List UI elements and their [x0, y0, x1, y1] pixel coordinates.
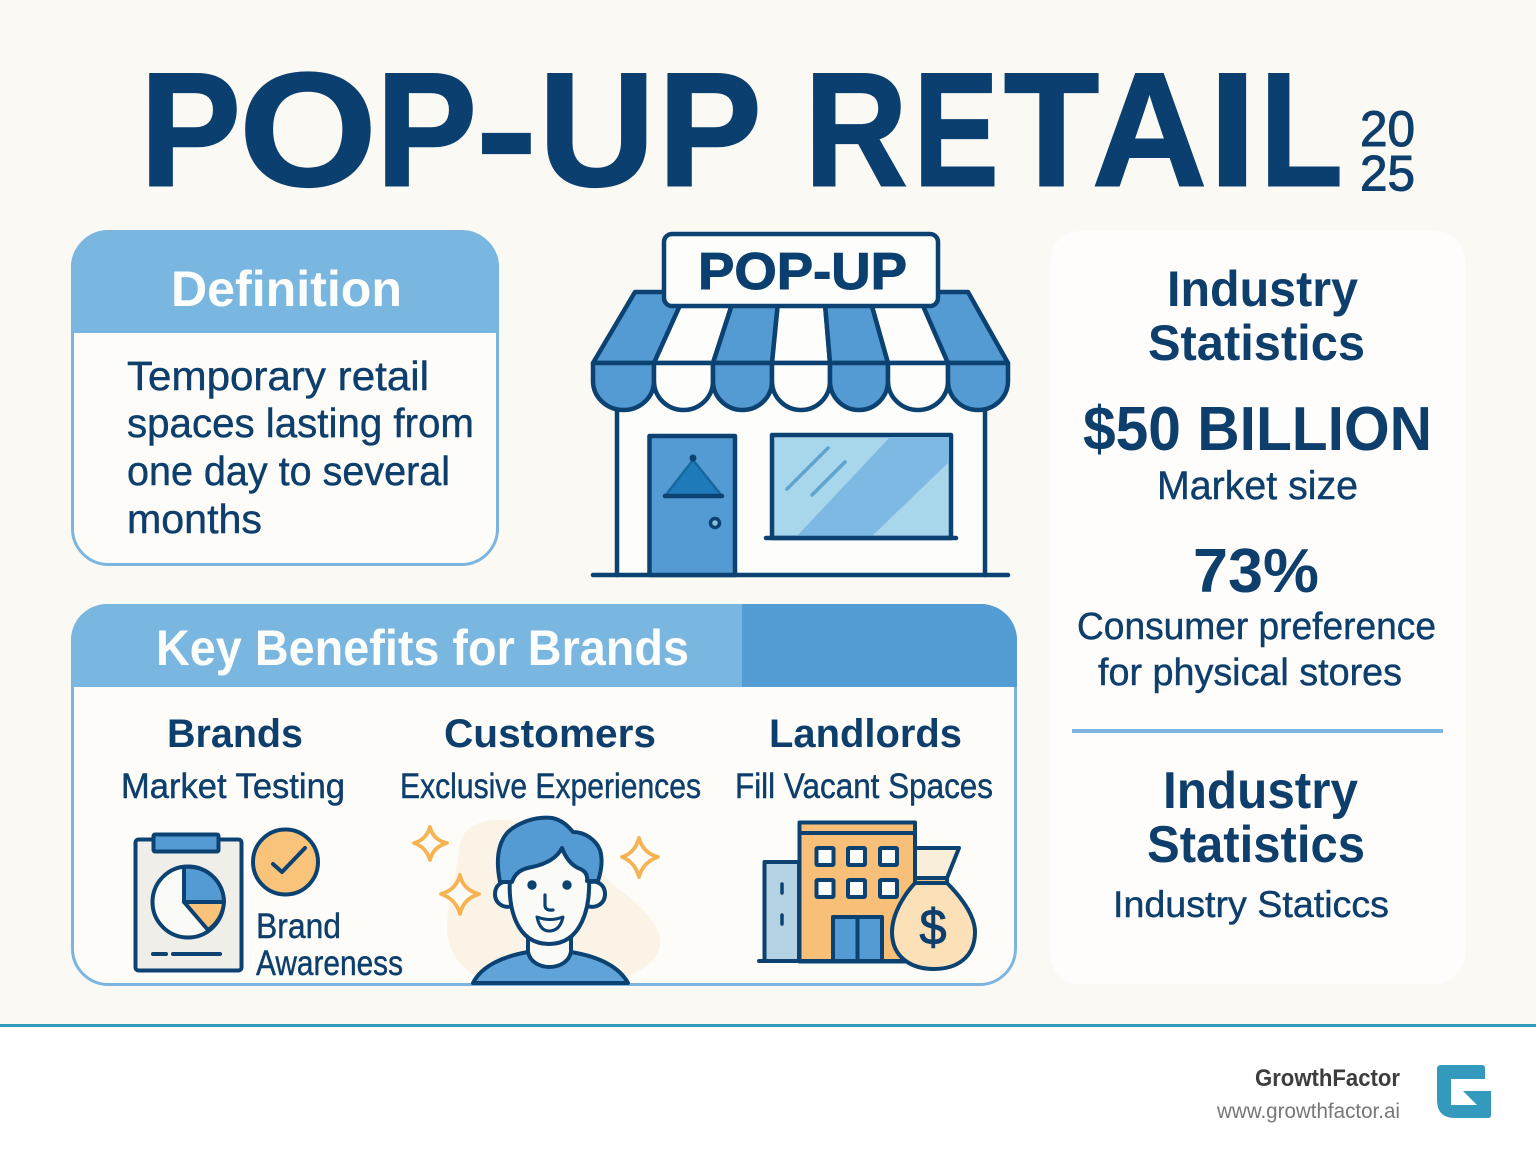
panel: key benefits — [71, 604, 1017, 984]
title: U — [538, 40, 655, 220]
stat: consumer preference — [1077, 537, 1436, 694]
icon: orange check badge — [253, 830, 318, 894]
heading: definition: Definition — [171, 261, 402, 317]
shop window — [766, 435, 956, 538]
heading: industry statistics — [1148, 261, 1365, 371]
title: P — [376, 40, 477, 220]
striped awning — [593, 292, 1008, 410]
heading: industry statistics repeat — [1147, 762, 1365, 874]
store sign — [664, 234, 938, 306]
store sign: POP-UP — [698, 243, 907, 301]
title: I — [1208, 40, 1257, 220]
heading: industry statistics: Industry — [1167, 261, 1358, 317]
stat: consumer preference: for physical stores — [1098, 652, 1402, 694]
title: T — [1004, 40, 1099, 220]
column text: market testing: Market Testing — [121, 767, 345, 806]
panel: industry statistics — [1050, 231, 1465, 984]
column text: fill vacant spaces: Fill Vacant Spaces — [735, 767, 993, 806]
title: A — [1092, 40, 1207, 220]
heading: key benefits: Key Benefits for Brands — [156, 620, 689, 676]
title: 25 — [1360, 146, 1415, 202]
icon: building with money bag: $ — [920, 899, 946, 955]
footer — [0, 1024, 1536, 1154]
icon: sparkles — [414, 827, 658, 914]
title: 20 — [1360, 101, 1415, 157]
door — [650, 436, 735, 575]
icon: clipboard with pie chart — [136, 834, 242, 970]
title: L — [1260, 40, 1343, 220]
column text: exclusive experiences: Exclusive Experiences — [400, 767, 701, 806]
definition text — [127, 353, 474, 542]
title: P — [140, 40, 241, 220]
stat: market size: Market size — [1157, 464, 1358, 508]
stat: market size — [1083, 395, 1432, 508]
logo — [1437, 1065, 1491, 1118]
text: industry staticcs: Industry Staticcs — [1113, 884, 1389, 925]
panel: definition — [71, 231, 499, 564]
title — [140, 40, 1415, 220]
heading: industry statistics repeat: Statistics — [1147, 816, 1365, 874]
title: P — [658, 40, 759, 220]
heading: industry statistics: Statistics — [1148, 315, 1365, 371]
definition text: months — [127, 496, 262, 542]
website: www.growthfactor.ai — [1216, 1100, 1400, 1123]
label: brand awareness — [256, 907, 403, 983]
heading: industry statistics repeat: Industry — [1163, 762, 1358, 820]
column heading: brands: Brands — [167, 712, 303, 756]
brand name: GrowthFactor — [1255, 1065, 1400, 1092]
illustration: pop-up storefront — [593, 234, 1008, 575]
background blob behind person — [447, 820, 660, 982]
icon: smiling customer — [473, 818, 628, 983]
column heading: customers: Customers — [444, 712, 656, 756]
stat: consumer preference: Consumer preference — [1077, 606, 1436, 648]
definition text: Temporary retail — [127, 353, 429, 399]
title: O — [239, 40, 377, 220]
definition text: one day to several — [127, 448, 450, 494]
label: brand awareness: Brand — [256, 907, 341, 946]
stat: market size: $50 BILLION — [1083, 395, 1432, 464]
title: R — [804, 40, 908, 220]
title: - — [476, 40, 537, 220]
icon: building with money bag — [759, 822, 975, 969]
label: brand awareness: Awareness — [256, 944, 403, 983]
column heading: landlords: Landlords — [769, 712, 962, 756]
definition text: spaces lasting from — [127, 400, 474, 446]
stat: consumer preference: 73% — [1193, 537, 1319, 606]
title: E — [913, 40, 999, 220]
